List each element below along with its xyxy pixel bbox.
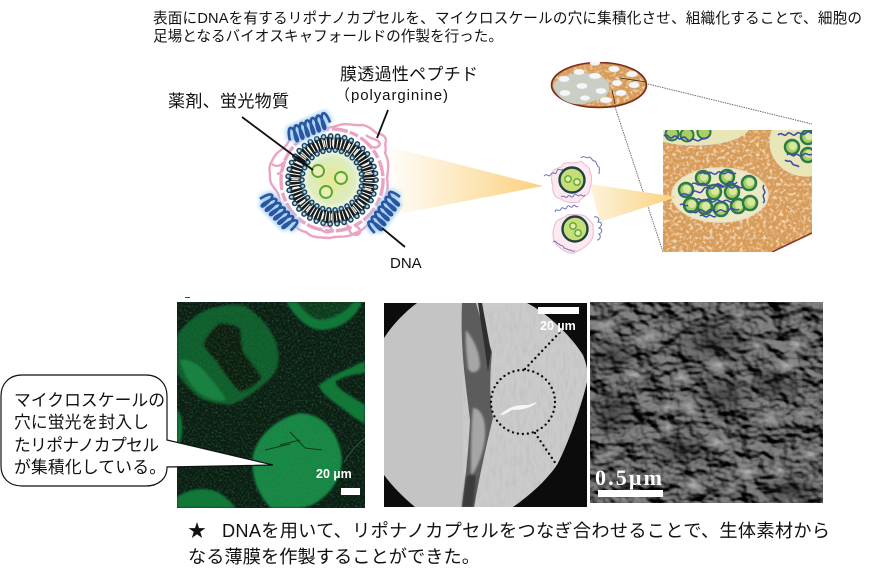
micrograph: SEM surface (585, 302, 825, 506)
label: peptide: （polyarginine) (335, 87, 448, 104)
scaffold disc (552, 61, 646, 108)
lipid tails (295, 143, 369, 217)
DNA helix: right (366, 190, 403, 235)
green pore: right (319, 361, 365, 424)
conclusion: DNAを用いて、リポナノカプセルをつなぎ合わせることで、生体素材から (222, 521, 830, 541)
peptide coat (270, 124, 388, 238)
dotted circle (491, 370, 555, 434)
scale label: 20 µm (316, 467, 352, 481)
DNA helix: top (285, 112, 332, 144)
green pore: top right (286, 302, 362, 330)
micrograph: pore cross-section (384, 303, 588, 507)
SEM lumps (590, 307, 824, 499)
conclusion: ★ (188, 521, 206, 541)
callout: 穴に蛍光を封入し (14, 413, 149, 432)
label: DNA: DNA (390, 255, 422, 272)
right lobe (463, 303, 588, 507)
label: drug: 薬剤、蛍光物質 (168, 92, 289, 111)
label: peptide: 膜透過性ペプチド (340, 65, 478, 84)
green pore: bottom (252, 413, 342, 508)
small tick (185, 297, 190, 298)
small capsules (544, 157, 602, 253)
green pore: bottom left (177, 489, 236, 508)
encapsulated drug rings (312, 165, 347, 198)
green pore: left edge (177, 408, 182, 452)
intro text: 足場となるバイオスキャフォールドの作製を行った。 (153, 28, 503, 45)
small capsule: lower (553, 205, 602, 253)
SEM scale label: 0.5µm (595, 465, 662, 490)
DNA helix: left (257, 191, 299, 233)
SEM scale bar (598, 490, 663, 497)
scale label: 20 µm (540, 319, 576, 333)
dark band (462, 303, 493, 507)
small capsule: upper (544, 157, 599, 203)
callout: が集積化している。 (14, 458, 166, 477)
callout (1, 375, 273, 486)
conclusion (188, 521, 830, 567)
leader lines (242, 110, 405, 247)
bright fissure (500, 402, 537, 415)
callout: マイクロスケールの (14, 391, 165, 410)
pore: top right (770, 130, 812, 176)
intro text (153, 10, 862, 45)
inner beads (302, 150, 362, 210)
dotted zoom guide lines (615, 84, 812, 252)
green pore: upper left (177, 305, 278, 405)
intro text: 表面にDNAを有するリポナノカプセルを、マイクロスケールの穴に集積化させ、組織化することで、細胞の (153, 10, 862, 27)
conclusion: なる薄膜を作製することができた。 (188, 547, 480, 567)
diagram: liposome nanocapsule (257, 112, 403, 238)
arrow: cone from capsule to small capsules (383, 145, 543, 217)
scale bar (538, 307, 579, 314)
outer beads (288, 136, 376, 224)
callout: たリポナノカプセル (14, 436, 159, 455)
label: peptide (335, 65, 478, 104)
left lobe (384, 303, 464, 507)
arrow: cone from small capsules to scaffold (590, 184, 677, 222)
pore: main (672, 168, 768, 222)
SEM shadow regions (585, 317, 825, 506)
pore: top left (663, 130, 749, 146)
scaffold enlarged view (663, 130, 812, 252)
scale bar (341, 488, 360, 495)
dotted zoom lines (524, 332, 561, 466)
micrograph: green fluorescence (177, 302, 365, 508)
